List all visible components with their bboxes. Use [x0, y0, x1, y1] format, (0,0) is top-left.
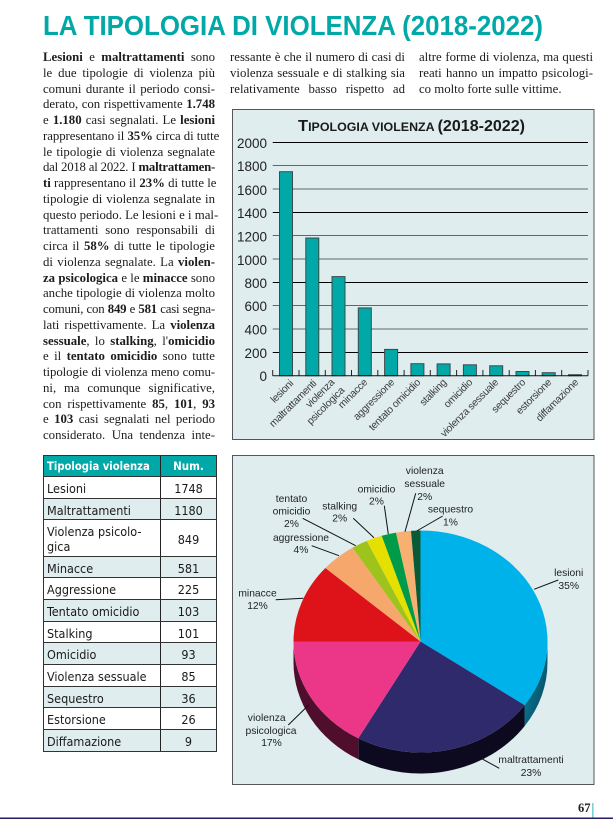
- text column 3: [419, 50, 593, 96]
- pie labels: sessuale: [404, 479, 445, 490]
- x axis labels: omicidio: [442, 377, 475, 410]
- y axis labels: 1400: [237, 206, 267, 221]
- text column 1: comuni durante il periodo consi-: [43, 82, 215, 96]
- pie slices: [294, 530, 548, 753]
- y axis labels: 1000: [237, 253, 267, 268]
- text column 1: lati rispettivamente. La violenza: [43, 318, 215, 332]
- x axis labels: psicologica: [305, 385, 347, 427]
- text column 1: rappresentano il 35% circa di tutte: [43, 129, 219, 143]
- x axis labels: diffamazione: [534, 377, 581, 424]
- table: tipologia violenza: 1180: [174, 502, 203, 518]
- text column 1: di violenza segnalate. La violen-: [43, 255, 215, 269]
- table: tipologia violenza: Minacce: [47, 560, 93, 576]
- text column 1: comuni, con 849 e 581 casi segna-: [43, 302, 215, 316]
- text column 1: ni, ma comunque significative,: [43, 381, 215, 395]
- table: tipologia violenza: 85: [181, 669, 196, 684]
- table: tipologia violenza: gica: [47, 539, 70, 554]
- text column 1: tipologie di violenza segnalate in: [43, 192, 215, 206]
- text column 1: za psicologica e le minacce sono: [43, 270, 215, 284]
- x axis labels: violenza: [304, 377, 337, 410]
- text column 3: altre forme di violenza, ma questi: [419, 50, 593, 64]
- text column 3: reati hanno un impatto psicologi-: [419, 66, 593, 80]
- table: tipologia violenza: Violenza psicolo-: [47, 524, 141, 539]
- table: tipologia violenza: Stalking: [47, 626, 92, 640]
- text column 1: derato, con rispettivamente 1.748: [43, 97, 215, 111]
- pie labels: sequestro: [428, 504, 473, 516]
- x axis labels: tentato omicidio: [367, 377, 423, 433]
- page number: 67: [578, 801, 590, 815]
- text column 1: e 1.180 casi segnalati. Le lesioni: [43, 113, 215, 127]
- table: tipologia violenza: Omicidio: [47, 647, 96, 662]
- table: tipologia violenza: 581: [178, 560, 199, 576]
- x axis labels: [268, 377, 581, 440]
- footer rule: [0, 818, 613, 819]
- x axis labels: lesioni: [269, 378, 296, 406]
- pie labels: 17%: [261, 738, 282, 749]
- y axis labels: 0: [259, 369, 267, 384]
- table: tipologia violenza: 1748: [174, 481, 203, 496]
- pie labels: omicidio: [273, 506, 311, 518]
- y axis labels: 2000: [237, 136, 267, 151]
- table: tipologia violenza: Num.: [173, 459, 204, 473]
- text column 1: tipologie di violenza meno comu-: [43, 365, 215, 379]
- text column 1: anche tipologie di violenza molto: [43, 286, 215, 300]
- page number: [578, 801, 594, 818]
- table: tipologia violenza: 225: [178, 582, 199, 597]
- x axis labels: minacce: [336, 377, 370, 411]
- pie labels: omicidio: [358, 484, 396, 496]
- pie labels: violenza: [406, 466, 444, 477]
- x axis labels: aggressione: [352, 377, 397, 423]
- table: tipologia violenza: 36: [181, 690, 196, 706]
- table: tipologia violenza: 26: [181, 712, 196, 727]
- text column 2: violenza sessuale e di stalking sia: [230, 66, 405, 80]
- pie labels: minacce: [238, 588, 277, 600]
- text column 1: considerato. Una tendenza inte-: [43, 428, 215, 442]
- text column 3: co molto forte sulle vittime.: [419, 82, 562, 96]
- text column 1: le tipologie di violenza segnalate: [43, 144, 215, 158]
- text column 2: ressante è che il numero di casi di: [230, 50, 405, 64]
- bar chart title: TIPOLOGIA VIOLENZA (2018-2022): [298, 118, 525, 135]
- table: tipologia violenza: Estorsione: [47, 712, 106, 727]
- x axis labels: maltrattamenti: [268, 378, 319, 430]
- text column 1: trattamenti sono responsabili di: [43, 223, 215, 237]
- pie labels: violenza: [248, 713, 286, 724]
- table: tipologia violenza: 9: [185, 734, 192, 749]
- table: tipologia violenza: [43, 455, 217, 752]
- pie labels: tentato: [276, 494, 308, 505]
- text column 1: dal 2018 al 2022. I maltrattamen-: [43, 160, 215, 174]
- y axis labels: 200: [244, 346, 267, 361]
- x axis labels: violenza sessuale: [439, 377, 501, 440]
- table: tipologia violenza: Tipologia violenza: [47, 460, 150, 472]
- y axis labels: [237, 136, 267, 384]
- text column 1: e 103 casi segnalati nel periodo: [43, 412, 215, 426]
- text column 1: le due tipologie di violenza più: [43, 66, 215, 80]
- text column 1: ti rappresentano il 23% di tutte le: [43, 176, 216, 190]
- table: tipologia violenza: Maltrattamenti: [47, 502, 131, 518]
- pie labels: aggressione: [273, 533, 329, 544]
- text column 1: questo periodo. Le lesioni e i mal-: [43, 208, 218, 222]
- pie labels: [238, 466, 583, 779]
- pie labels: maltrattamenti: [498, 755, 564, 766]
- x axis labels: stalking: [418, 377, 449, 408]
- pie labels: psicologica: [246, 726, 297, 737]
- pie labels: 4%: [294, 545, 308, 556]
- y axis labels: 1200: [237, 230, 267, 244]
- x axis labels: estorsione: [515, 377, 554, 417]
- pie labels: 2%: [417, 492, 432, 503]
- table: tipologia violenza: 103: [178, 604, 199, 619]
- table: tipologia violenza: 93: [181, 647, 196, 662]
- y axis labels: 1800: [237, 159, 267, 174]
- pie labels: 35%: [558, 581, 579, 592]
- table: tipologia violenza: Sequestro: [47, 690, 104, 706]
- table: tipologia violenza: 849: [178, 532, 199, 546]
- pie labels: 2%: [284, 519, 299, 530]
- pie labels: 1%: [443, 518, 458, 528]
- table: tipologia violenza: Lesioni: [47, 481, 86, 496]
- table: tipologia violenza: Aggressione: [47, 582, 116, 597]
- pie leader lines: [276, 493, 558, 768]
- table: tipologia violenza: Tentato omicidio: [47, 604, 139, 619]
- bars: [280, 172, 582, 376]
- text column 1: con rispettivamente 85, 101, 93: [43, 396, 215, 410]
- table: tipologia violenza: 101: [178, 626, 199, 640]
- text column 1: Lesioni e maltrattamenti sono: [43, 50, 215, 64]
- text column 1: circa il 58% di tutte le tipologie: [43, 239, 215, 253]
- pie labels: 2%: [332, 514, 347, 524]
- pie side wall: [294, 642, 548, 774]
- pie labels: 2%: [369, 496, 384, 508]
- pie labels: lesioni: [554, 568, 583, 579]
- pie labels: 23%: [521, 768, 541, 779]
- text column 1: [43, 50, 219, 442]
- y axis labels: 800: [244, 276, 267, 291]
- table: tipologia violenza: Violenza sessuale: [47, 669, 147, 684]
- y axis labels: 1600: [237, 183, 267, 198]
- table: tipologia violenza: Diffamazione: [47, 734, 121, 749]
- text column 2: [230, 50, 405, 96]
- text column 1: e il tentato omicidio sono tutte: [43, 349, 215, 363]
- x axis labels: sequestro: [490, 377, 528, 416]
- y axis labels: 400: [244, 322, 267, 338]
- pie labels: 12%: [247, 601, 268, 612]
- panel: pie chart: [232, 456, 594, 784]
- text column 1: sessuale, lo stalking, l'omicidio: [43, 334, 215, 348]
- panel: bar chart: [232, 110, 594, 440]
- y axis labels: 600: [244, 299, 267, 314]
- pie labels: stalking: [322, 502, 357, 512]
- title: LA TIPOLOGIA DI VIOLENZA (2018-2022): [43, 10, 543, 41]
- text column 2: relativamente basso rispetto ad: [230, 82, 405, 96]
